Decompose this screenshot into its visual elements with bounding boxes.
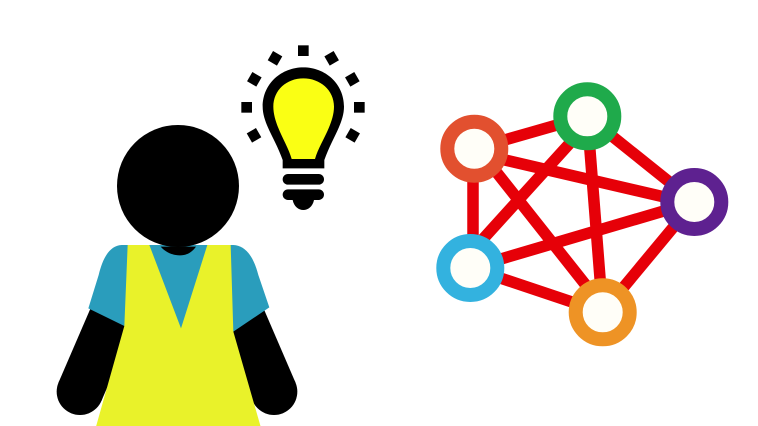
node: blue [443, 241, 497, 295]
network connections [460, 116, 694, 312]
node: green [560, 89, 614, 143]
right arm hand [251, 368, 297, 415]
bulb base lower cap [283, 189, 324, 210]
figure: person in yellow vest [57, 125, 297, 426]
node: purple [667, 175, 721, 229]
bulb base upper band [283, 174, 324, 185]
light rays [241, 45, 365, 143]
right arm [242, 317, 274, 392]
node: red [447, 122, 501, 176]
left arm hand [57, 368, 103, 415]
head [117, 125, 239, 247]
bulb glass [273, 78, 334, 159]
network diagram [443, 89, 721, 339]
blue shirt [88, 245, 269, 332]
left arm [80, 314, 114, 392]
bulb outline [263, 67, 344, 168]
node: orange [576, 285, 630, 339]
chin [161, 247, 196, 255]
icon: light bulb [241, 45, 365, 210]
yellow vest [96, 245, 261, 426]
